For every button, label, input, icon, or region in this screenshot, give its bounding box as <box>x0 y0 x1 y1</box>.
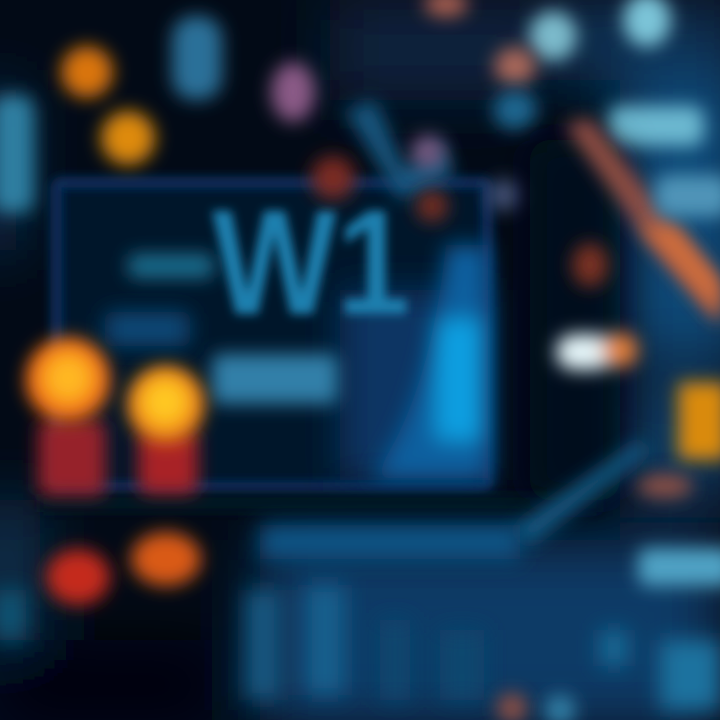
blue check shape <box>345 100 455 200</box>
small label <box>105 312 190 346</box>
red spot <box>311 156 355 200</box>
blob left edge <box>0 95 34 213</box>
glowing lights <box>26 338 204 496</box>
pale blobs top <box>0 0 521 222</box>
pale spot <box>529 11 577 61</box>
red reflection <box>46 549 110 605</box>
reflection <box>0 525 720 720</box>
pale right bar <box>655 175 720 217</box>
pale low bar <box>638 548 720 586</box>
headline W1: W1 <box>212 178 410 346</box>
pink spot <box>411 135 445 169</box>
monitor frame <box>56 182 488 488</box>
monitor <box>40 178 600 512</box>
red base right <box>138 430 198 494</box>
glow left core <box>40 350 96 406</box>
glow right core <box>138 375 192 429</box>
bottom salmon spot <box>497 693 527 720</box>
orange dot 1 <box>61 46 113 98</box>
monitor screen glow <box>340 290 490 480</box>
red base left <box>38 420 106 496</box>
bottom pale spot <box>544 694 576 720</box>
pale bar <box>608 106 704 146</box>
diagonal blue line <box>510 440 650 545</box>
right side shapes <box>493 0 720 586</box>
pale spot 2 <box>623 0 671 47</box>
glow left <box>26 338 110 422</box>
stand line <box>40 494 600 512</box>
orange block <box>678 382 720 460</box>
red spot right <box>572 243 608 287</box>
red spot 2 <box>416 190 448 222</box>
pink blob <box>271 62 315 122</box>
blob top <box>172 16 222 100</box>
orange dot 2 <box>101 111 155 165</box>
salmon streak <box>565 118 720 325</box>
orange dots top left <box>61 46 155 165</box>
blue reflection bars <box>0 525 720 710</box>
cyan column <box>372 245 488 478</box>
blue spot <box>493 90 537 130</box>
text bar <box>128 254 214 278</box>
orange reflection <box>131 532 201 586</box>
salmon spot <box>494 47 536 85</box>
salmon low <box>637 474 693 498</box>
white and orange pill <box>556 332 638 370</box>
top salmon spot <box>424 0 468 17</box>
glow right <box>128 367 204 443</box>
dark block <box>530 140 620 500</box>
text bar bright <box>212 354 338 404</box>
orange streak <box>640 225 720 320</box>
mauve spot <box>489 179 521 211</box>
